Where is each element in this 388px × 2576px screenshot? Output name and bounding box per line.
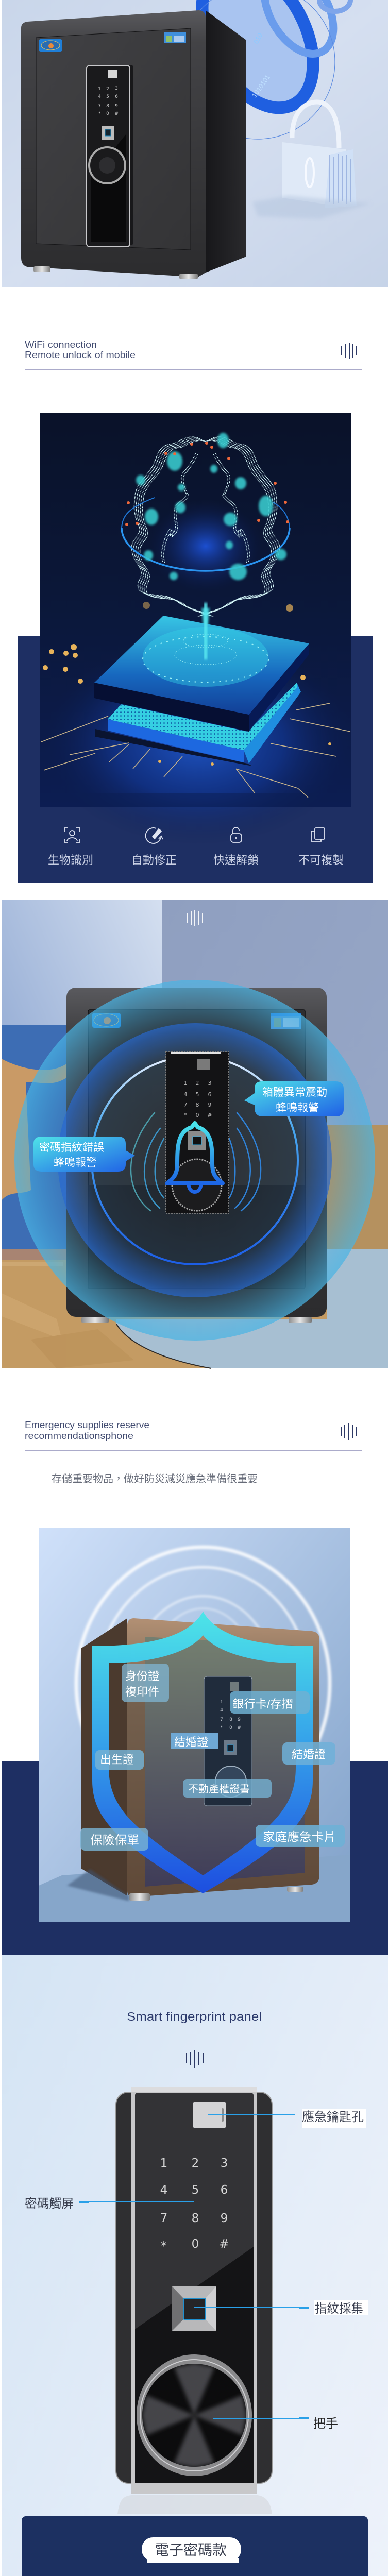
section heading: emergency supplies: Emergency supplies reserve [25, 1419, 149, 1430]
lock panel: 7 [98, 104, 101, 109]
leader: emergency keyhole [208, 2109, 366, 2128]
sketchy lock panel: # [207, 1112, 212, 1118]
label: ID copy [122, 1664, 169, 1702]
sketchy lock panel: 0 [196, 1112, 199, 1118]
smart panel heading [127, 2010, 262, 2068]
keypad: 1 [160, 2157, 167, 2170]
lock panel: * [221, 1725, 223, 1731]
alarm wave overlay [14, 980, 375, 1341]
icon: white sound bars [188, 910, 203, 926]
background blue data rings: 010 [252, 31, 264, 45]
keypad: 3 [221, 2157, 228, 2170]
label: bank card: 銀行卡/存摺 [232, 1698, 293, 1710]
digital brain [122, 433, 290, 626]
sketchy lock panel: 7 [183, 1101, 188, 1108]
label: family emergency card [256, 1825, 345, 1847]
background blue data rings: 1010101 [250, 73, 272, 99]
icon: sound bars [342, 343, 357, 359]
keypad [160, 2157, 229, 2253]
keypad: 6 [221, 2183, 228, 2197]
shield outline [92, 1612, 313, 1893]
keypad: 4 [160, 2183, 167, 2197]
label: marriage certificate: 結婚證 [174, 1736, 208, 1749]
leader: handle: 把手 [313, 2417, 338, 2431]
keypad: 8 [192, 2212, 199, 2225]
lock panel: 6 [115, 94, 118, 99]
section heading: emergency supplies [25, 1419, 356, 1441]
rotary handle [137, 2354, 252, 2476]
leader: fingerprint capture [194, 2300, 368, 2316]
badge: certificate sticker [271, 1013, 301, 1029]
lock panel: 9 [238, 1717, 241, 1722]
lock panel: 1 [98, 87, 101, 92]
section heading: WiFi connection: WiFi connection [25, 339, 97, 350]
feature: quick unlock [213, 827, 259, 867]
keypad: 9 [221, 2212, 228, 2225]
callout: wrong password or fingerprint alarm [33, 1137, 135, 1172]
lock panel: 0 [106, 111, 109, 116]
lock panel: 8 [106, 104, 109, 109]
sketchy lock panel: 3 [208, 1080, 211, 1087]
emergency key cover [193, 2102, 226, 2128]
feature icons row [48, 827, 344, 867]
label: marriage certificate [171, 1733, 218, 1749]
hero image [2, 0, 388, 287]
sketchy lock panel: 6 [208, 1091, 211, 1098]
badge: hologram [92, 1013, 121, 1028]
panel reflection [117, 2495, 272, 2514]
label: birth certificate: 出生證 [100, 1753, 134, 1766]
lock panel: 7 [220, 1717, 223, 1722]
label: marriage certificate right [282, 1742, 335, 1765]
lock panel: 0 [229, 1725, 232, 1731]
lock panel: 1 [220, 1700, 223, 1705]
wooden cabinet [327, 1125, 388, 1251]
label: real estate certificate: 不動產權證書 [188, 1783, 250, 1795]
label: insurance policy [80, 1828, 148, 1851]
navy panel behind chip image [18, 636, 373, 883]
keypad: 5 [192, 2183, 199, 2197]
lock panel [204, 1676, 252, 1806]
label: bank card [230, 1691, 310, 1714]
callout: abnormal vibration alarm: 箱體異常震動 [262, 1087, 327, 1098]
callout: wrong password or fingerprint alarm: 蜂鳴報警 [54, 1157, 97, 1168]
label: ID copy: 複印件 [125, 1685, 159, 1698]
feature: biometric recognition [48, 828, 93, 867]
carpet [116, 1249, 388, 1368]
sketchy lock panel: 2 [196, 1080, 199, 1087]
callout: wrong password or fingerprint alarm: 密碼指紋錯誤 [39, 1142, 104, 1154]
section heading: WiFi connection: Remote unlock of mobile [25, 349, 136, 360]
pill: electronic password model: 電子密碼款 [155, 2542, 227, 2558]
section heading: WiFi connection [25, 339, 357, 360]
lock panel: 3 [115, 86, 118, 91]
panel: unlock methods [22, 2516, 368, 2576]
smart panel heading: Smart fingerprint panel [127, 2010, 262, 2023]
chip [41, 602, 350, 798]
icon: sound bars [341, 1423, 356, 1440]
callout: abnormal vibration alarm: 蜂鳴報警 [276, 1102, 319, 1114]
sketchy lock panel: 9 [208, 1101, 211, 1108]
leader: emergency keyhole: 應急鑰匙孔 [302, 2110, 364, 2124]
sketchy lock panel: 8 [196, 1101, 199, 1108]
label: birth certificate [95, 1750, 144, 1770]
icon: sound bars [187, 2050, 203, 2068]
keypad: # [219, 2238, 229, 2251]
leader: password touchscreen [25, 2197, 194, 2211]
navy band [2, 1761, 388, 1955]
feature: cannot be copied [298, 828, 344, 867]
lock panel: 5 [106, 94, 109, 99]
lock panel: 2 [106, 87, 109, 92]
emergency supplies safe image [39, 1528, 350, 1922]
feature: automatic correction [131, 828, 177, 867]
safe front [66, 988, 327, 1323]
label: real estate certificate [183, 1779, 272, 1798]
keypad: 7 [160, 2212, 167, 2225]
lock panel: 9 [115, 104, 118, 109]
gold safe [67, 1618, 319, 1901]
leader: handle [213, 2417, 338, 2431]
floor [2, 1257, 388, 1368]
sketchy lock panel: 1 [183, 1080, 188, 1087]
leader: fingerprint capture: 指紋採集 [315, 2302, 363, 2316]
feature: quick unlock: 快速解鎖 [213, 854, 259, 867]
lock panel: * [98, 111, 101, 116]
label: marriage certificate right: 結婚證 [292, 1748, 326, 1761]
lock panel: 4 [220, 1708, 223, 1713]
label: ID copy: 身份證 [125, 1670, 159, 1683]
safe with fingerprint panel [21, 10, 246, 279]
icon: alarm bell [167, 1123, 223, 1192]
label: family emergency card: 家庭應急卡片 [263, 1830, 336, 1843]
label: insurance policy: 保險保單 [90, 1834, 139, 1848]
sketchy lock panel [166, 1052, 229, 1213]
sketchy lock panel: 5 [196, 1091, 199, 1098]
leader: password touchscreen: 密碼觸屏 [25, 2197, 74, 2211]
sketchy lock panel: * [184, 1112, 187, 1118]
subtitle: 存儲重要物品，做好防災減災應急準備很重要 [52, 1472, 258, 1485]
alarm room scene [2, 900, 388, 1368]
chip and digital brain image [40, 413, 353, 845]
background blue data rings [179, 0, 350, 139]
sketchy lock panel: 4 [183, 1091, 188, 1098]
sofa and blanket [2, 1025, 66, 1260]
lock panel: # [237, 1725, 241, 1731]
icon: open padlock [252, 102, 371, 219]
lock panel: # [114, 111, 119, 116]
lock panel: 8 [229, 1717, 232, 1722]
lock panel [87, 65, 133, 247]
keypad: 0 [192, 2238, 199, 2251]
badge: certificate sticker [164, 32, 186, 43]
keypad: 2 [192, 2157, 199, 2170]
feature: cannot be copied: 不可複製 [298, 854, 344, 867]
fingerprint sensor [172, 2286, 216, 2331]
callout: abnormal vibration alarm [244, 1081, 344, 1116]
feature: biometric recognition: 生物識別 [48, 854, 93, 867]
pill: electronic password model [142, 2537, 241, 2563]
keypad: * [161, 2240, 167, 2253]
rings [76, 1547, 330, 1820]
badge: hologram [39, 39, 62, 52]
lock panel: 4 [98, 94, 101, 99]
section heading: emergency supplies: recommendationsphone [25, 1430, 133, 1441]
fingerprint panel illustration [116, 2087, 272, 2514]
feature: automatic correction: 自動修正 [131, 854, 177, 867]
smart panel section background [2, 1955, 388, 2576]
